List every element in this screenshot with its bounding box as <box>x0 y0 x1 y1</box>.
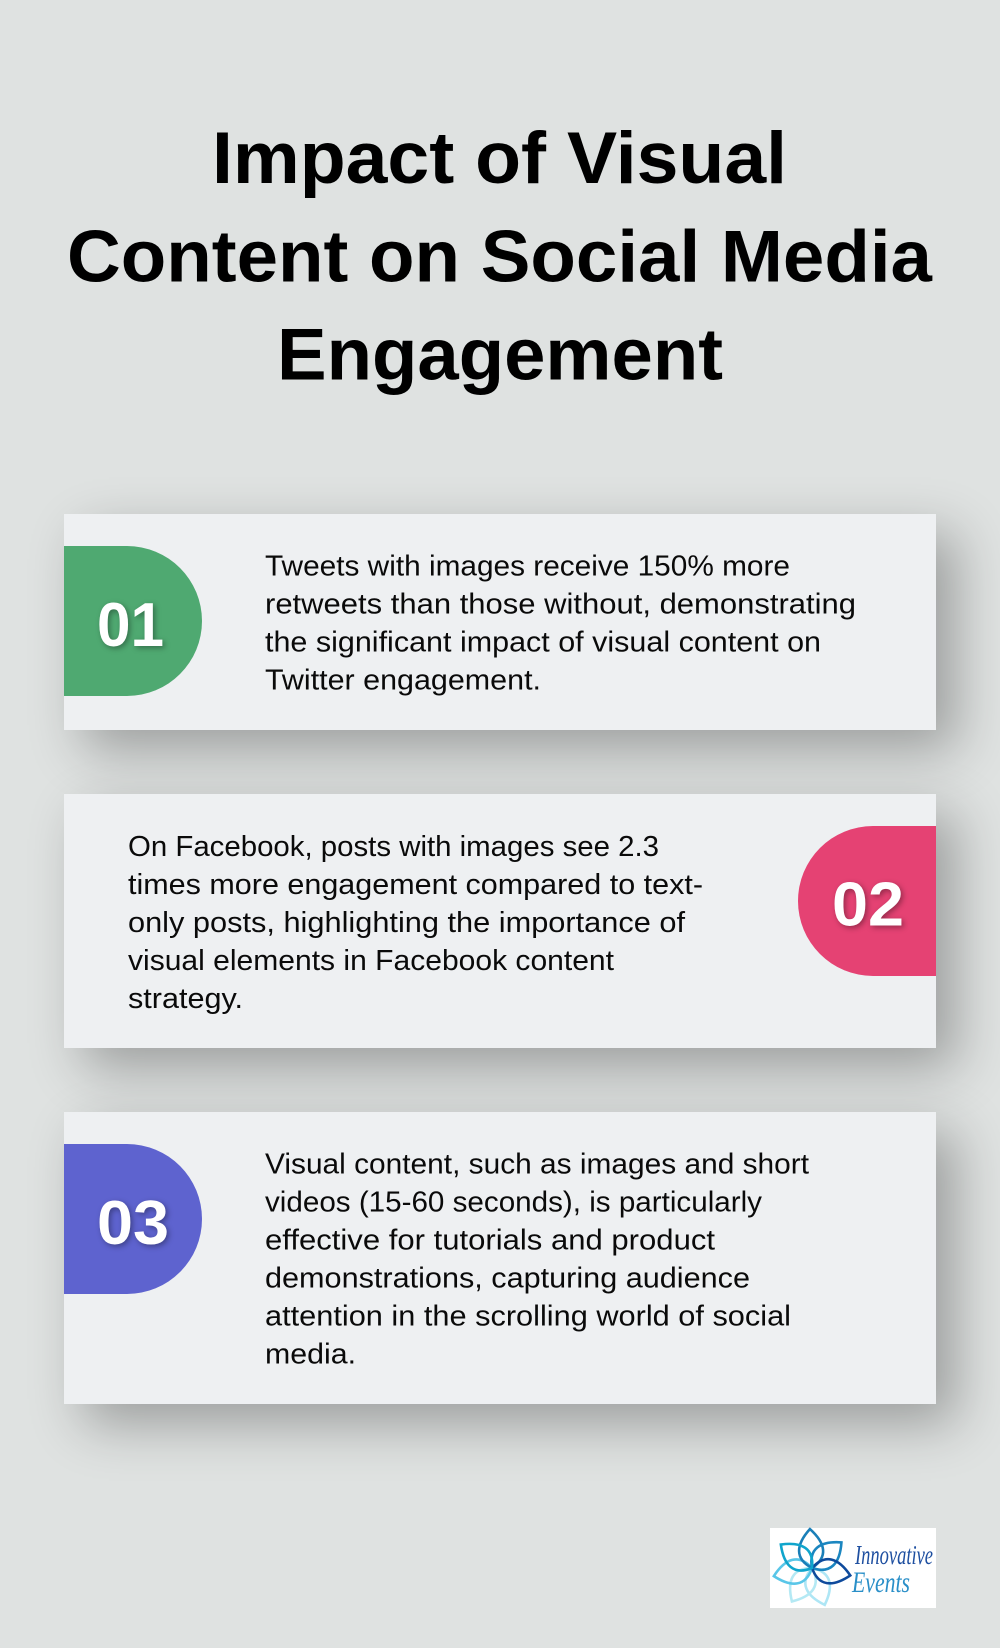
text: facebook statistic: times more engagement compared to text- <box>128 869 703 901</box>
text: tweets statistic: retweets than those without, demonstrating <box>265 588 856 620</box>
icon: flower <box>771 1528 853 1609</box>
text: tweets statistic: Tweets with images receive 150% more <box>265 550 790 582</box>
text: tweets statistic <box>265 550 856 696</box>
text: visual content tips: attention in the scrolling world of social <box>265 1300 791 1332</box>
text: tweets statistic: Twitter engagement. <box>265 664 541 696</box>
text: facebook statistic <box>128 831 703 1015</box>
logo wordmark: Events <box>851 1566 910 1599</box>
panel: card 1 <box>64 514 936 730</box>
panel: card 3 <box>64 1112 936 1404</box>
badge 01 <box>64 546 202 696</box>
text: visual content tips: effective for tutorials and product <box>265 1224 715 1256</box>
number 01: 01 <box>97 591 164 660</box>
number 03: 03 <box>97 1189 169 1258</box>
title: Impact of Visual <box>212 118 787 199</box>
text: visual content tips: Visual content, such as images and short <box>265 1148 809 1180</box>
text: visual content tips: videos (15-60 seconds), is particularly <box>265 1186 762 1218</box>
panel: card 2 <box>64 794 936 1048</box>
title: Content on Social Media <box>67 216 933 298</box>
text: visual content tips <box>265 1148 809 1370</box>
text: facebook statistic: On Facebook, posts with images see 2.3 <box>128 831 659 863</box>
number 02: 02 <box>832 870 904 940</box>
text: facebook statistic: strategy. <box>128 983 243 1015</box>
text: visual content tips: demonstrations, capturing audience <box>265 1262 750 1294</box>
text: facebook statistic: only posts, highlighting the importance of <box>128 907 686 939</box>
logo wordmark <box>851 1540 933 1599</box>
logo: Innovative Events <box>770 1527 936 1608</box>
text: tweets statistic: the significant impact of visual content on <box>265 626 821 658</box>
logo wordmark: Innovative <box>854 1540 933 1570</box>
title: Engagement <box>277 314 723 396</box>
title <box>67 118 933 396</box>
badge 03 <box>64 1144 202 1294</box>
badge 02 <box>798 826 936 976</box>
text: facebook statistic: visual elements in Facebook content <box>128 945 614 977</box>
text: visual content tips: media. <box>265 1338 356 1370</box>
